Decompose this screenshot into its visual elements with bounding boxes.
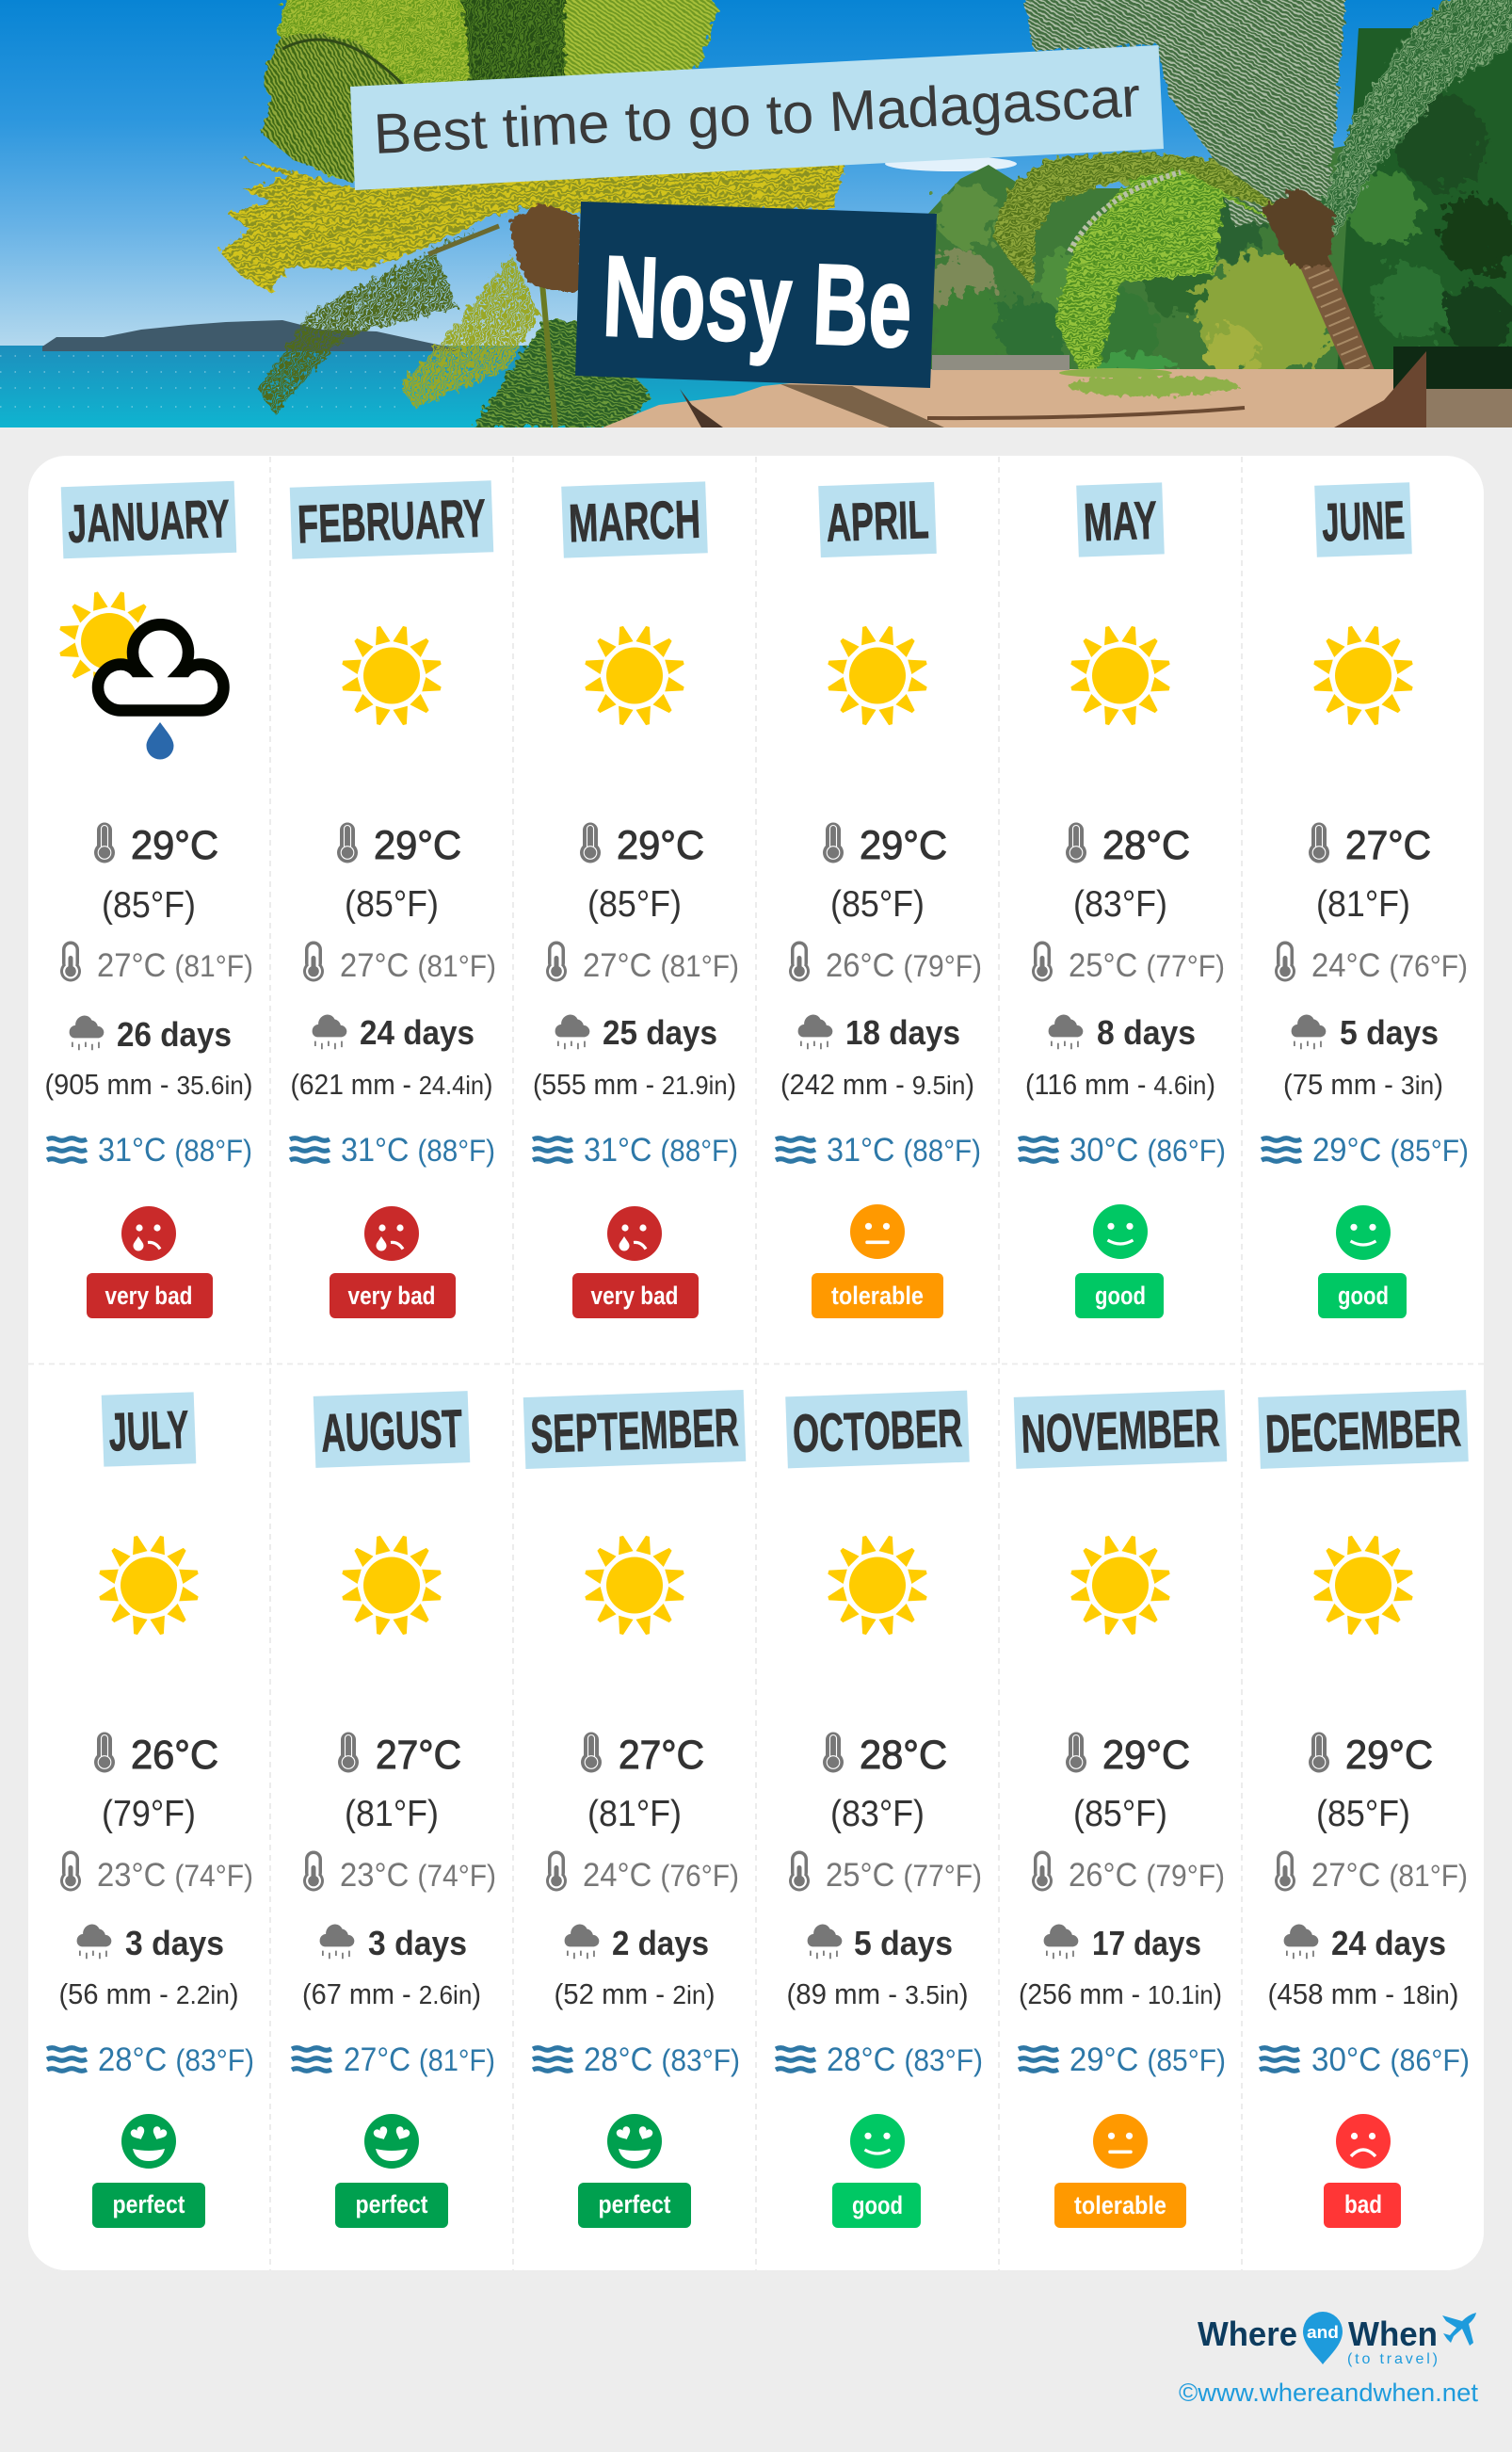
rainy days: 5 days — [1340, 1013, 1439, 1052]
month label — [290, 480, 493, 559]
max temperature fahrenheit: (79°F) — [102, 1794, 196, 1834]
rainy days: 26 days — [117, 1015, 232, 1054]
rating badge — [812, 1273, 943, 1318]
sea temperature: 28°C (83°F) — [827, 2041, 983, 2078]
rating face — [121, 1206, 176, 1261]
column: February — [290, 480, 496, 1318]
max temperature fahrenheit: (85°F) — [345, 884, 439, 925]
rainy days: 8 days — [1097, 1013, 1196, 1052]
month label: OCTOBER — [792, 1398, 963, 1464]
column: March — [533, 481, 739, 1318]
website credit: ©www.whereandwhen.net — [1179, 2379, 1478, 2407]
max temperature — [338, 1733, 461, 1778]
month label: SEPTEMBER — [530, 1397, 740, 1465]
rainy days: 24 days — [360, 1013, 475, 1052]
column: November — [1014, 1390, 1227, 2228]
month label — [523, 1390, 746, 1469]
rating face — [364, 2114, 419, 2169]
rainy days — [798, 1013, 960, 1052]
column: April — [776, 482, 982, 1318]
column: December — [1258, 1390, 1470, 2228]
rating face — [121, 2114, 176, 2169]
sea temperature: 29°C (85°F) — [1070, 2041, 1226, 2078]
panel: monthly calendar card — [28, 456, 1484, 2270]
icon: sun — [1312, 1534, 1414, 1637]
max temperature — [94, 1733, 218, 1778]
rating badge: very bad — [591, 1282, 678, 1310]
logo: Where and When — [1198, 2312, 1476, 2367]
sea temperature: 31°C (88°F) — [98, 1132, 252, 1169]
min temperature: 27°C (81°F) — [1311, 1857, 1468, 1894]
min temperature — [789, 942, 982, 984]
min temperature: 24°C (76°F) — [1311, 947, 1468, 984]
sea temperature: 31°C (88°F) — [827, 1132, 981, 1169]
rating face — [850, 2114, 905, 2169]
rainy days: 18 days — [845, 1013, 960, 1052]
destination banner: Nosy Be: Nosy Be — [601, 232, 914, 372]
max temperature: 29°C — [131, 823, 218, 868]
rainy days — [565, 1924, 709, 1962]
max temperature — [823, 1733, 947, 1778]
rating face — [1336, 1205, 1391, 1260]
max temperature — [1309, 1733, 1433, 1778]
column: May — [1019, 482, 1226, 1318]
rainy days: 3 days — [125, 1924, 224, 1962]
rating badge — [87, 1273, 213, 1318]
destination banner: Nosy Be — [575, 202, 937, 388]
rainfall: (458 mm - 18in) — [1267, 1977, 1459, 2010]
month label: JANUARY — [67, 489, 231, 555]
icon: sun — [1312, 624, 1414, 727]
min temperature: 23°C (74°F) — [97, 1857, 253, 1894]
rainy days — [555, 1013, 717, 1052]
month label — [1314, 482, 1412, 557]
rating face — [1093, 2114, 1148, 2169]
max temperature: 29°C — [374, 823, 461, 868]
column: January — [45, 481, 253, 1318]
rating badge: good — [1338, 1282, 1389, 1310]
logo: Where and When: (to travel) — [1347, 2351, 1438, 2367]
max temperature — [1066, 1733, 1190, 1778]
rainy days: 25 days — [603, 1013, 717, 1052]
rainfall: (555 mm - 21.9in) — [533, 1068, 736, 1101]
rating badge: very bad — [348, 1282, 435, 1310]
min temperature — [1032, 942, 1225, 984]
min temperature: 26°C (79°F) — [826, 947, 982, 984]
month label: MAY — [1083, 491, 1158, 553]
max temperature — [1309, 823, 1431, 868]
min temperature — [546, 1851, 739, 1894]
month label: JUNE — [1321, 490, 1406, 554]
rating badge: perfect — [356, 2190, 428, 2218]
min temperature: 25°C (77°F) — [1069, 947, 1225, 984]
icon: sun behind rain cloud — [58, 590, 223, 759]
max temperature: 28°C — [860, 1733, 947, 1778]
max temperature — [823, 823, 947, 868]
rainy days — [70, 1015, 232, 1054]
rainy days: 17 days — [1092, 1924, 1201, 1962]
icon: sun — [341, 1534, 442, 1637]
sea temperature: 31°C (88°F) — [341, 1132, 495, 1169]
rating badge — [1054, 2183, 1186, 2228]
column: June — [1262, 482, 1469, 1318]
rainy days — [313, 1013, 475, 1052]
rainy days — [1292, 1013, 1439, 1052]
month label — [818, 482, 937, 557]
column: September — [523, 1390, 746, 2228]
rainy days — [1044, 1924, 1201, 1962]
max temperature fahrenheit: (83°F) — [830, 1794, 925, 1834]
rainfall: (242 mm - 9.5in) — [780, 1068, 974, 1101]
min temperature — [303, 1851, 496, 1894]
column: October — [776, 1391, 983, 2228]
rating face — [850, 1204, 905, 1259]
min temperature: 23°C (74°F) — [340, 1857, 496, 1894]
rating badge — [1318, 1273, 1407, 1318]
min temperature: 25°C (77°F) — [826, 1857, 982, 1894]
max temperature fahrenheit: (85°F) — [1316, 1794, 1410, 1834]
min temperature: 27°C (81°F) — [583, 947, 739, 984]
max temperature fahrenheit: (81°F) — [345, 1794, 439, 1834]
max temperature fahrenheit: (83°F) — [1073, 884, 1167, 925]
rainfall: (905 mm - 35.6in) — [45, 1068, 252, 1101]
min temperature — [1275, 942, 1468, 984]
rating badge — [335, 2183, 448, 2228]
icon: sun — [827, 1534, 928, 1637]
rating badge — [572, 1273, 699, 1318]
max temperature — [1066, 823, 1190, 868]
max temperature: 27°C — [376, 1733, 461, 1778]
rainfall: (67 mm - 2.6in) — [302, 1977, 481, 2010]
logo: Where and When: and — [1307, 2323, 1339, 2342]
rating face — [1093, 1204, 1148, 1259]
min temperature — [1275, 1851, 1468, 1894]
min temperature — [303, 942, 496, 984]
max temperature fahrenheit: (85°F) — [587, 884, 682, 925]
rating badge — [1324, 2183, 1401, 2228]
title banner: Best time to go to Madagascar — [372, 65, 1142, 166]
month label — [61, 481, 236, 558]
rainfall: (621 mm - 24.4in) — [290, 1068, 493, 1101]
icon: sun — [341, 624, 442, 727]
month label: MARCH — [568, 490, 701, 554]
max temperature fahrenheit: (85°F) — [102, 885, 196, 926]
rating face — [364, 1206, 419, 1261]
max temperature: 29°C — [1345, 1733, 1433, 1778]
rainy days — [320, 1924, 467, 1962]
rainfall: (52 mm - 2in) — [554, 1977, 716, 2010]
rating badge: bad — [1344, 2190, 1382, 2218]
rating badge — [1075, 1273, 1164, 1318]
rating badge: very bad — [105, 1282, 192, 1310]
rating badge — [330, 1273, 456, 1318]
icon: sun — [584, 1534, 685, 1637]
rainy days: 5 days — [854, 1924, 953, 1962]
icon: sun — [584, 624, 685, 727]
month label: NOVEMBER — [1021, 1397, 1221, 1465]
min temperature — [546, 942, 739, 984]
month label: APRIL — [825, 490, 930, 554]
max temperature — [581, 1733, 704, 1778]
rating badge: tolerable — [831, 1282, 924, 1310]
max temperature: 29°C — [617, 823, 704, 868]
sea temperature: 30°C (86°F) — [1070, 1132, 1226, 1169]
logo: Where and When: Where — [1198, 2315, 1297, 2353]
rating face — [607, 2114, 662, 2169]
month label — [561, 481, 708, 558]
rainy days: 3 days — [368, 1924, 467, 1962]
sea temperature: 30°C (86°F) — [1311, 2041, 1470, 2078]
min temperature — [60, 942, 253, 984]
rainy days: 2 days — [612, 1924, 709, 1962]
month label: JULY — [107, 1400, 190, 1462]
month label — [785, 1391, 970, 1468]
min temperature: 26°C (79°F) — [1069, 1857, 1225, 1894]
month label: AUGUST — [320, 1398, 463, 1464]
max temperature fahrenheit: (81°F) — [1316, 884, 1410, 925]
max temperature fahrenheit: (81°F) — [587, 1794, 682, 1834]
rainy days — [1284, 1924, 1446, 1962]
rainfall: (89 mm - 3.5in) — [787, 1977, 968, 2010]
rainfall: (116 mm - 4.6in) — [1025, 1068, 1215, 1101]
max temperature fahrenheit: (85°F) — [830, 884, 925, 925]
max temperature: 27°C — [619, 1733, 704, 1778]
month label — [102, 1392, 196, 1467]
column: July — [47, 1392, 254, 2228]
rating badge: good — [1095, 1282, 1146, 1310]
sea temperature: 28°C (83°F) — [98, 2041, 254, 2078]
rainfall: (75 mm - 3in) — [1283, 1068, 1443, 1101]
month label — [314, 1391, 470, 1468]
rating badge: tolerable — [1074, 2191, 1166, 2219]
rainy days: 24 days — [1331, 1924, 1446, 1962]
max temperature: 27°C — [1345, 823, 1431, 868]
min temperature — [1032, 1851, 1225, 1894]
rating badge: good — [852, 2191, 903, 2219]
rating badge — [832, 2183, 921, 2228]
column: August — [292, 1391, 496, 2228]
sea temperature: 28°C (83°F) — [584, 2041, 740, 2078]
max temperature: 26°C — [131, 1733, 218, 1778]
header photo: palm beach scene — [0, 0, 1512, 427]
rainy days — [77, 1924, 224, 1962]
rainy days — [808, 1924, 953, 1962]
rating badge: perfect — [113, 2190, 185, 2218]
sea temperature: 27°C (81°F) — [344, 2041, 495, 2078]
rating face — [607, 1206, 662, 1261]
min temperature: 27°C (81°F) — [340, 947, 496, 984]
rainfall: (56 mm - 2.2in) — [58, 1977, 239, 2010]
max temperature — [580, 823, 704, 868]
icon: sun — [1070, 624, 1171, 727]
icon: sun — [98, 1534, 200, 1637]
rating badge: perfect — [599, 2190, 671, 2218]
rainy days — [1049, 1013, 1196, 1052]
rainfall: (256 mm - 10.1in) — [1019, 1977, 1222, 2010]
min temperature: 27°C (81°F) — [97, 947, 253, 984]
max temperature — [337, 823, 461, 868]
sea temperature: 31°C (88°F) — [584, 1132, 738, 1169]
max temperature — [94, 823, 218, 868]
max temperature: 28°C — [1102, 823, 1190, 868]
min temperature: 24°C (76°F) — [583, 1857, 739, 1894]
icon: sun — [827, 624, 928, 727]
max temperature fahrenheit: (85°F) — [1073, 1794, 1167, 1834]
month label: FEBRUARY — [297, 489, 487, 555]
sea temperature: 29°C (85°F) — [1312, 1132, 1469, 1169]
month label — [1014, 1390, 1227, 1469]
max temperature: 29°C — [1102, 1733, 1190, 1778]
icon: sun — [1070, 1534, 1171, 1637]
rating badge — [92, 2183, 205, 2228]
min temperature — [60, 1851, 253, 1894]
logo: Where and When: When — [1348, 2315, 1438, 2353]
title banner — [350, 45, 1164, 190]
month label — [1076, 482, 1165, 557]
min temperature — [789, 1851, 982, 1894]
max temperature: 29°C — [860, 823, 947, 868]
rating badge — [578, 2183, 691, 2228]
rating face — [1336, 2114, 1391, 2169]
